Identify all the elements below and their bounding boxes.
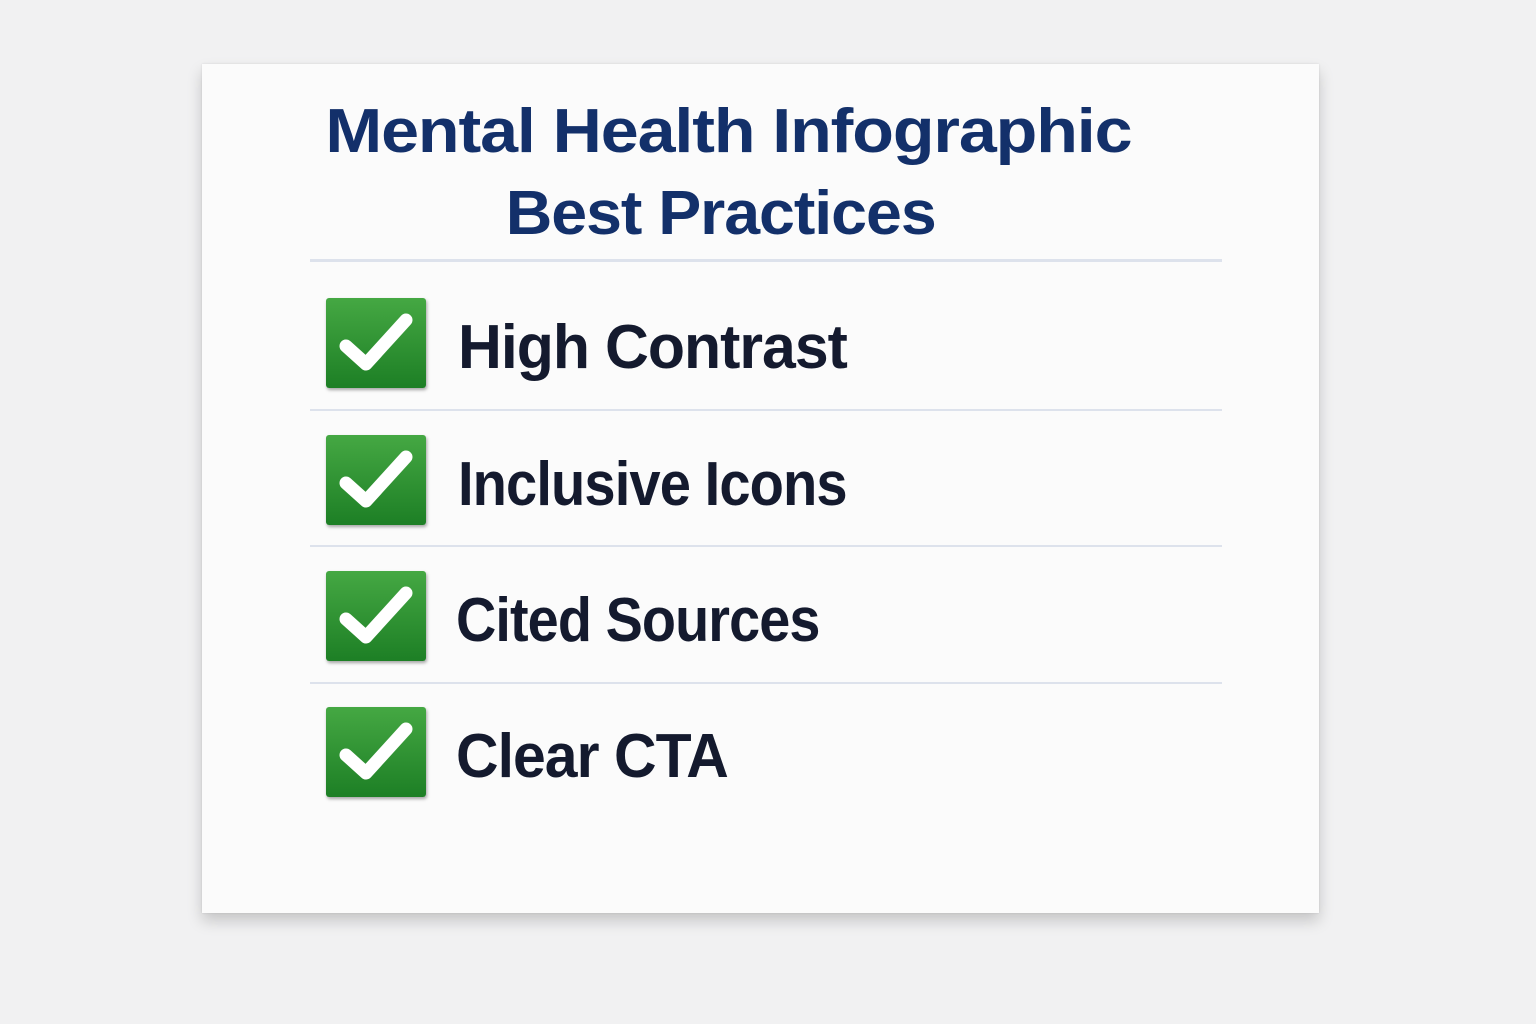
item: Inclusive Icons: [325, 435, 847, 529]
icon: check: [326, 571, 426, 661]
item: Cited Sources: [325, 571, 820, 665]
icon: check: [326, 298, 426, 388]
card panel: [202, 64, 1319, 913]
title: Best Practices: [506, 179, 936, 248]
label: Clear CTA: [456, 722, 728, 791]
title: Mental Health Infographic: [325, 97, 1131, 166]
icon: check: [326, 707, 426, 797]
icon: check: [326, 435, 426, 525]
title: [325, 97, 1131, 248]
item: High Contrast: [325, 298, 848, 392]
label: High Contrast: [458, 313, 847, 382]
item: Clear CTA: [325, 707, 728, 801]
label: Cited Sources: [456, 586, 820, 655]
label: Inclusive Icons: [458, 450, 847, 519]
